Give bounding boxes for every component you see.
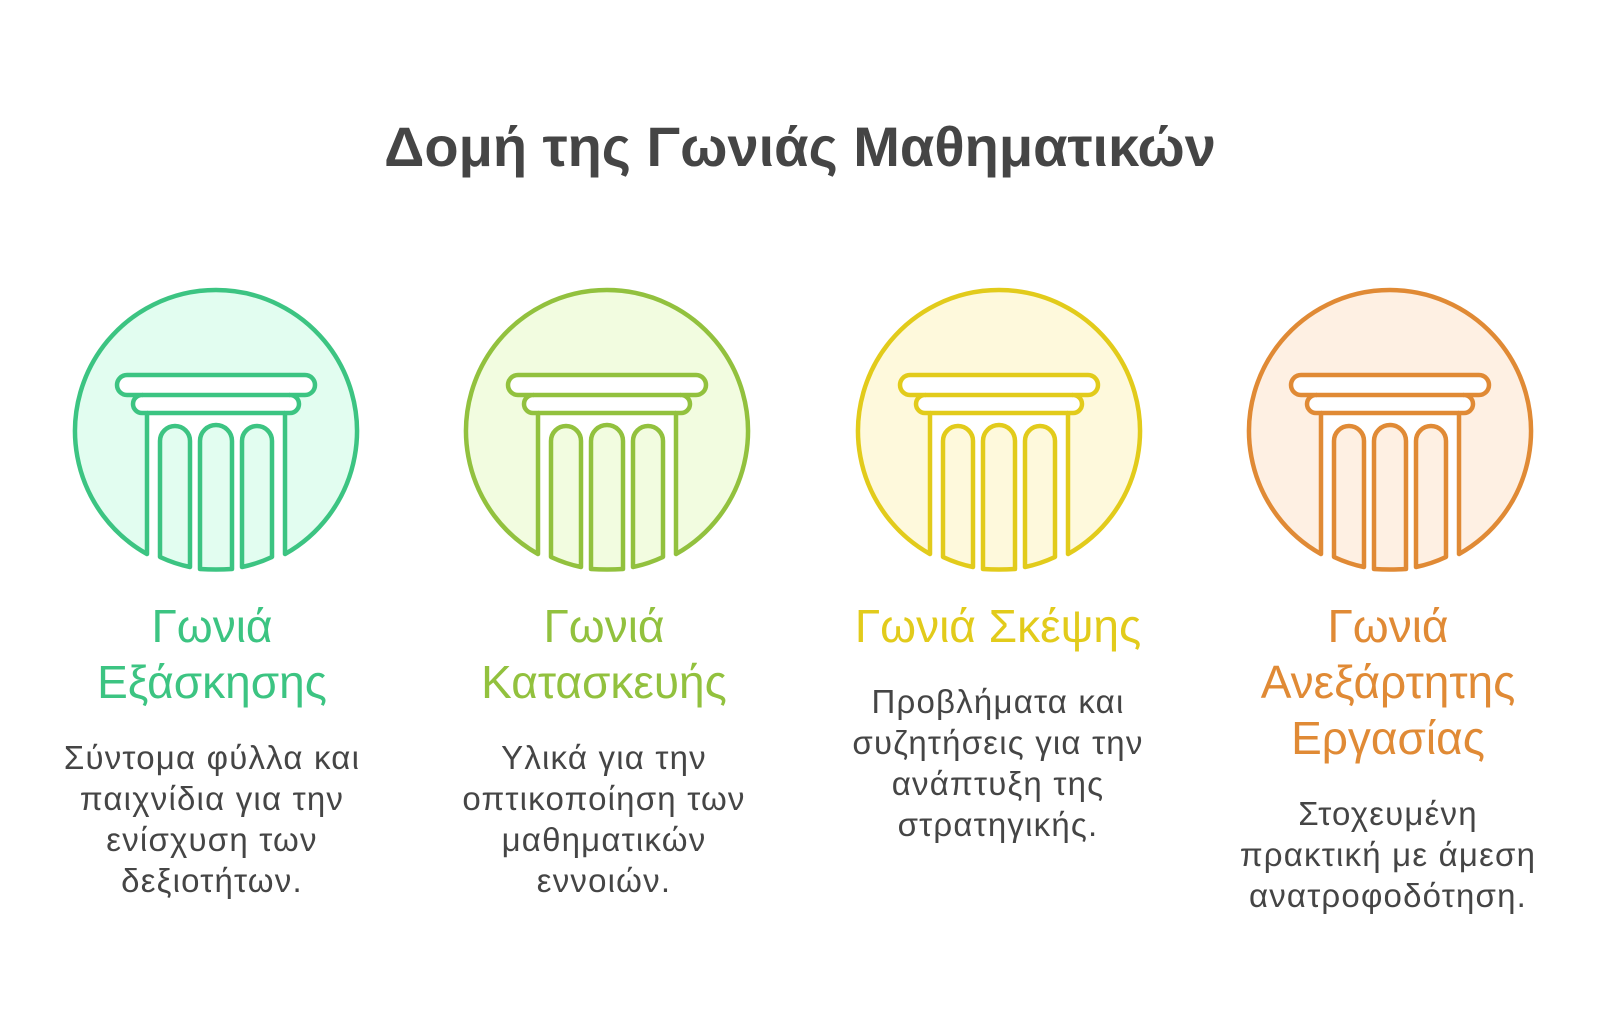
text block: ενίσχυση των — [106, 821, 318, 858]
text block: συζητήσεις για την — [852, 724, 1144, 761]
text block: Σύντομα φύλλα και — [64, 739, 360, 776]
panel: construction corner — [462, 600, 746, 899]
text block: ανατροφοδότηση. — [1249, 877, 1527, 914]
title: Δομή της Γωνιάς Μαθηματικών — [384, 115, 1216, 178]
heading — [1260, 600, 1515, 764]
heading: Εξάσκησης — [97, 656, 327, 708]
heading: Κατασκευής — [481, 656, 727, 708]
text block: πρακτική με άμεση — [1240, 836, 1536, 873]
text block — [852, 683, 1144, 843]
text block — [64, 739, 360, 899]
panel: independent work corner — [1240, 600, 1536, 914]
icon: pillar yellow — [858, 290, 1140, 570]
text block: παιχνίδια για την — [80, 780, 344, 817]
icon: pillar green — [75, 290, 357, 570]
heading: Γωνιά — [1327, 600, 1449, 652]
heading: Γωνιά — [151, 600, 273, 652]
text block: Στοχευμένη — [1298, 795, 1478, 832]
heading — [481, 600, 727, 708]
text block: στρατηγικής. — [898, 806, 1098, 843]
icon: pillar lime — [466, 290, 748, 570]
heading: Εργασίας — [1291, 712, 1485, 764]
text block: Υλικά για την — [501, 739, 707, 776]
icon: pillar orange — [1249, 290, 1531, 570]
panel: thinking corner — [852, 600, 1144, 843]
text block: οπτικοποίηση των — [462, 780, 746, 817]
panel: practice corner — [64, 600, 360, 899]
text block: εννοιών. — [537, 862, 671, 899]
text block: ανάπτυξη της — [892, 765, 1104, 802]
text block: δεξιοτήτων. — [121, 862, 303, 899]
heading: Ανεξάρτητης — [1261, 656, 1515, 708]
text block — [462, 739, 746, 899]
heading: Γωνιά Σκέψης — [855, 600, 1141, 652]
heading — [97, 600, 327, 708]
text block: Προβλήματα και — [871, 683, 1124, 720]
text block — [1240, 795, 1536, 914]
heading: Γωνιά — [543, 600, 665, 652]
text block: μαθηματικών — [502, 821, 706, 858]
